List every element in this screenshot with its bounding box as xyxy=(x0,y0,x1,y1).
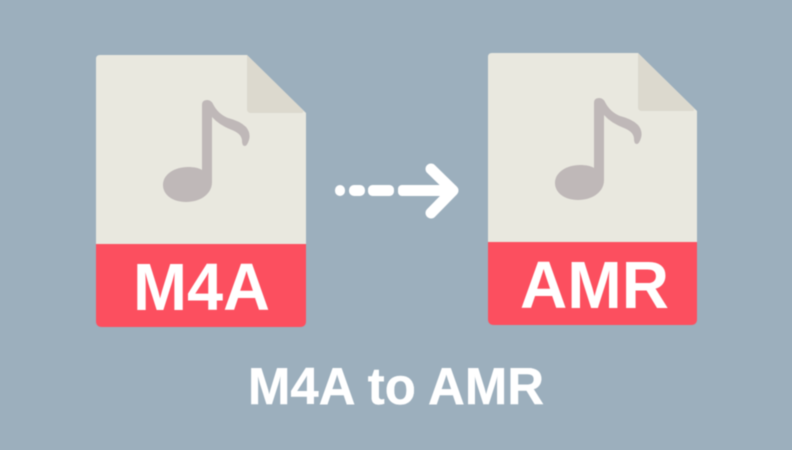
icon: music note xyxy=(555,98,642,200)
folded corner xyxy=(247,55,303,113)
icon: M4A source file xyxy=(96,55,306,327)
folded corner xyxy=(638,53,694,111)
file page xyxy=(488,53,697,244)
format label: AMR: AMR xyxy=(520,248,669,323)
file page xyxy=(96,55,306,246)
format label: M4A: M4A xyxy=(133,250,270,325)
format band xyxy=(488,242,697,325)
icon: AMR target file xyxy=(488,53,697,325)
icon: music note xyxy=(163,100,250,202)
format band xyxy=(96,244,306,327)
caption: M4A to AMR xyxy=(248,358,544,416)
arrow: conversion direction xyxy=(335,169,453,213)
